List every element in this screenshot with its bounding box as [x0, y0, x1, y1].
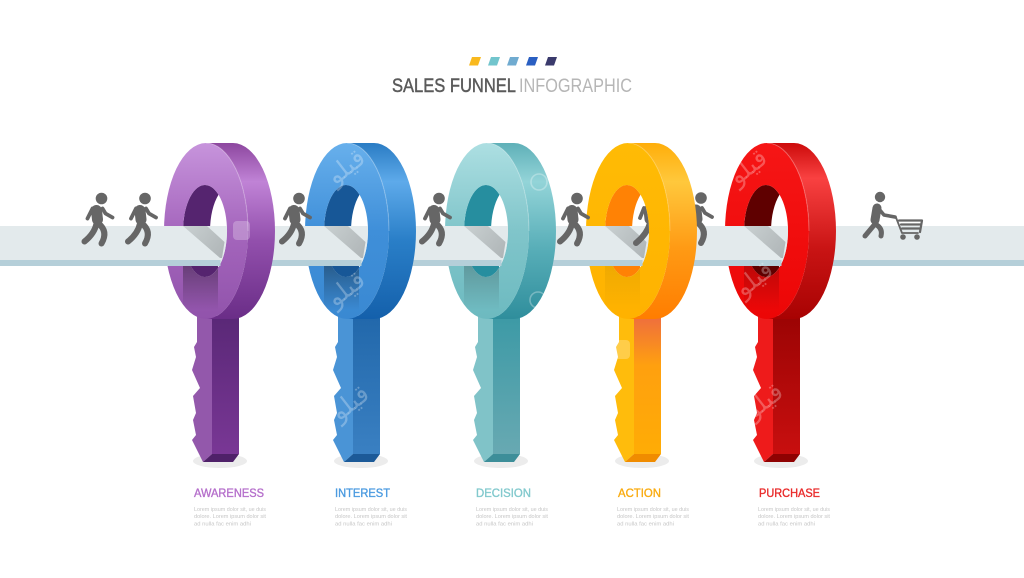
description [758, 507, 830, 528]
ring [586, 143, 697, 319]
watermark lower: قيلو [727, 255, 779, 304]
bar passing through ring [164, 226, 227, 266]
description: Lorem ipsum dolor sit, ue duis [476, 507, 548, 513]
description: dolore. Lorem ipsum dolor sit [194, 514, 266, 520]
person walking 2 [128, 193, 156, 244]
description [617, 507, 689, 528]
person walking 3 [282, 193, 310, 244]
description: Lorem ipsum dolor sit, ue duis [617, 507, 689, 513]
key shadow [474, 454, 528, 468]
description: dolore. Lorem ipsum dolor sit [758, 514, 830, 520]
key shadow [193, 454, 247, 468]
step label: purchase [758, 486, 830, 528]
description: Lorem ipsum dolor sit, ue duis [758, 507, 830, 513]
ring shadow on bar [183, 226, 224, 258]
description: ad nulla fac enim adhi [476, 522, 533, 528]
description [476, 507, 548, 528]
watermark logo on shaft [614, 340, 630, 359]
step label: action [617, 486, 689, 528]
watermark circle upper [531, 174, 547, 190]
description: Lorem ipsum dolor sit, ue duis [335, 507, 407, 513]
title: SALES FUNNEL [392, 75, 516, 97]
key: interest [305, 143, 416, 468]
ring shadow on bar [744, 226, 786, 258]
conveyor bar [0, 226, 1024, 266]
person walking 4 [422, 193, 450, 244]
key shaft [333, 316, 380, 462]
key: purchase [721, 143, 836, 468]
bar passing through ring [445, 226, 508, 266]
key shadow [754, 454, 808, 468]
description [194, 507, 266, 528]
step label: decision [476, 486, 548, 528]
person hidden behind orange ring, right side [695, 192, 712, 243]
description: dolore. Lorem ipsum dolor sit [476, 514, 548, 520]
ring [725, 143, 836, 319]
heading: DECISION [476, 486, 531, 500]
title [392, 75, 632, 97]
watermark logo [233, 221, 250, 240]
description: dolore. Lorem ipsum dolor sit [617, 514, 689, 520]
watermark upper: قيلو [319, 143, 371, 192]
step label: awareness [194, 486, 266, 528]
watermark circle lower [530, 292, 546, 308]
description: Lorem ipsum dolor sit, ue duis [194, 507, 266, 513]
key shaft [192, 316, 239, 462]
ring shadow on bar [464, 226, 506, 258]
heading: INTEREST [335, 486, 391, 500]
watermark shaft: قيلو [737, 377, 789, 426]
description: dolore. Lorem ipsum dolor sit [335, 514, 407, 520]
heading: PURCHASE [759, 486, 820, 500]
key shadow [334, 454, 388, 468]
heading: AWARENESS [194, 486, 264, 500]
person walking 1 [84, 193, 112, 244]
step label: interest [335, 486, 407, 528]
description: ad nulla fac enim adhi [194, 522, 251, 528]
key shaft [753, 316, 800, 462]
ring shadow on bar [324, 226, 366, 258]
description [335, 507, 407, 528]
ring [305, 143, 416, 319]
key: awareness [164, 143, 275, 468]
person walking 5 [560, 193, 588, 244]
key shaft [473, 316, 520, 462]
bar passing through ring [586, 226, 649, 266]
bar passing through ring [305, 226, 368, 266]
description: ad nulla fac enim adhi [758, 522, 815, 528]
heading: ACTION [618, 486, 661, 500]
ring shadow on bar [605, 226, 646, 258]
description: ad nulla fac enim adhi [335, 522, 392, 528]
bar passing through ring [725, 226, 788, 266]
watermark lower: قيلو [319, 265, 371, 314]
description: ad nulla fac enim adhi [617, 522, 674, 528]
key: action [586, 143, 697, 468]
watermark upper: قيلو [721, 143, 773, 192]
key shaft [614, 316, 661, 462]
key: decision [445, 143, 556, 468]
person with shopping cart [865, 192, 922, 240]
colour swatches [469, 57, 557, 66]
ring [445, 143, 556, 319]
title: INFOGRAPHIC [519, 75, 632, 97]
person seen through orange ring [633, 206, 649, 246]
ring [164, 143, 275, 319]
key shadow [615, 454, 669, 468]
watermark shaft: قيلو [323, 379, 375, 428]
